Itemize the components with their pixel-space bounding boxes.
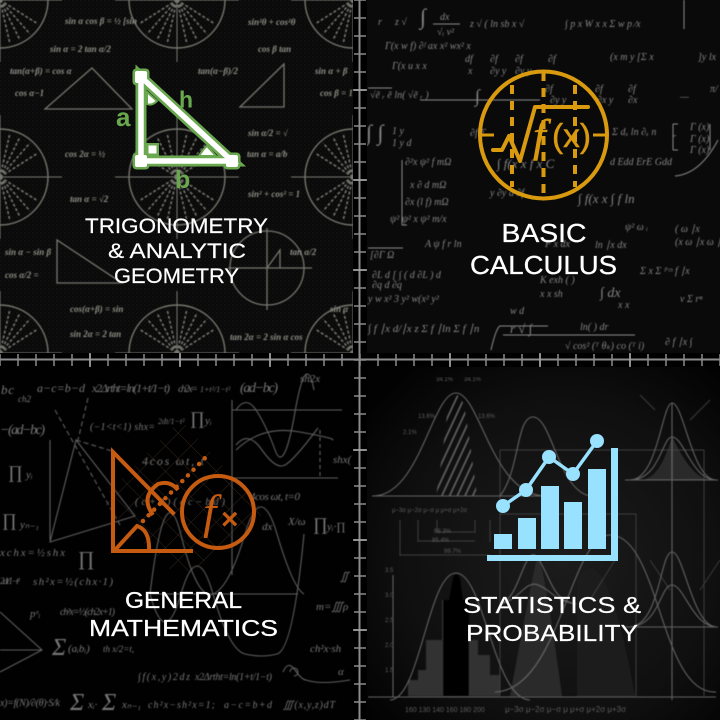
heading: general mathematics: GENERAL (125, 587, 242, 613)
panel background: calculus formulas: ∫ p x W x x Σ w p ∕x (564, 19, 641, 30)
panel background: chalk trigonometry sketches: tan α/2 (290, 247, 317, 257)
panel background: chalk trigonometry sketches: sin 2α = 2 tan (69, 329, 121, 339)
panel: statistics and probability (367, 367, 720, 720)
heading: trigonometry and analytic geometry (85, 215, 268, 288)
panel background: chalkboard formulas and curves: ∏ (8, 462, 23, 482)
panel background: chalkboard formulas and curves: xᵢ· (87, 699, 98, 711)
panel background: chalkboard formulas and curves: ch²x=½(ch2x+1) (60, 607, 116, 618)
panel background: calculus formulas: ∂f (595, 84, 604, 95)
panel background: chalk trigonometry sketches: sin²θ + cos²θ (247, 17, 296, 27)
panel background: calculus formulas: ∂y y (550, 95, 567, 106)
heading: statistics and probability: PROBABILITY (466, 620, 638, 646)
panel background: calculus formulas: Σ dₓ ln ∂ₓ n (611, 127, 656, 138)
panel background: calculus formulas: ]y lx (697, 52, 717, 63)
panel background: chalk trigonometry sketches: cos(α+β) = sin (70, 304, 123, 314)
panel background: calculus formulas: K exh ( ) (539, 275, 575, 286)
panel background: chalkboard formulas and curves: m=∭ρ (316, 601, 348, 613)
panel background: calculus formulas: x ∂ d mΩ (409, 180, 446, 191)
panel background: normal distribution charts: 68.3% (434, 529, 452, 535)
panel background: chalkboard formulas and curves: x)=f(N)/∂(θ)·S/k (0, 698, 61, 709)
panel background: normal distribution charts: μ−3σ μ−2σ μ−σ μ μ+σ μ+2σ μ+3σ (505, 705, 626, 714)
panel background: calculus formulas: [∂Γ Ω (370, 250, 394, 261)
panel background: calculus formulas: ∫ (418, 4, 428, 30)
panel background: normal distribution charts: 3.5 (385, 568, 394, 574)
panel background: calculus formulas: v Σ rⁿ (680, 294, 703, 305)
panel background: chalkboard formulas and curves: th x/2=t, (103, 644, 134, 654)
panel background: calculus formulas: x x sh (539, 289, 563, 300)
icon label: fx: × (221, 503, 239, 536)
panel background: chalk trigonometry sketches: sin α + β (314, 66, 348, 76)
panel background: chalkboard formulas and curves: (aᵢbᵢ) (68, 643, 90, 655)
panel background: chalkboard formulas and curves: ∏ (190, 408, 205, 428)
icon label: side letters: b (175, 166, 190, 194)
panel background: calculus formulas: ∂x (l f) mΩ (405, 197, 449, 208)
panel background: calculus formulas: Γ (x) (689, 134, 710, 145)
panel background: chalkboard formulas and curves: sh²x=½(chx·1) (33, 576, 113, 588)
panel background: chalk trigonometry sketches: sin α/2 = √ (247, 128, 289, 138)
heading: trigonometry and analytic geometry: GEOMETRY (114, 265, 239, 288)
panel background: calculus formulas: ln( ) dr (580, 322, 608, 333)
panel background: chalkboard formulas and curves: xₙ₋₁ (121, 699, 141, 711)
panel background: calculus formulas: r (672, 132, 676, 143)
panel background: chalkboard formulas and curves: ∏ (78, 548, 94, 570)
panel background: chalk trigonometry sketches: tan α = √2 (70, 194, 109, 204)
panel background: calculus formulas: Γ (x) (689, 122, 710, 133)
panel background: chalkboard formulas and curves: X/ω (287, 516, 306, 528)
panel background: normal distribution charts: 95.4% (432, 538, 450, 544)
panel background: chalkboard formulas and curves: 2dt/1−t² (158, 417, 185, 426)
panel background: chalkboard formulas and curves: yᵢ (204, 415, 212, 427)
panel background: calculus formulas: π/ (710, 84, 719, 95)
panel background: calculus formulas: Γ (x) (689, 145, 710, 156)
panel background: chalkboard formulas and curves: 4cos ωt, t=0 (250, 491, 300, 503)
panel background: chalk trigonometry sketches: tan α = a/b (247, 149, 288, 159)
heading: basic calculus: BASIC (502, 220, 586, 248)
panel background: chalkboard formulas and curves: ∬ (340, 571, 350, 583)
panel background: chalkboard formulas and curves: bc (1, 382, 14, 397)
heading: trigonometry and analytic geometry: & ANALYTIC (108, 240, 246, 263)
panel background: normal distribution charts: 2.0 (385, 643, 394, 649)
panel background: chalkboard formulas and curves: a−c=b+d (224, 700, 273, 711)
panel background: calculus formulas: w d (510, 306, 525, 317)
panel background: calculus formulas: ∂f (548, 54, 557, 65)
icon: gold circle with square root of f(x) (480, 72, 607, 198)
panel background: chalkboard formulas and curves: −(ad−bc) (0, 423, 45, 438)
panel background: calculus formulas: ψ² ψ² x ψ² m/x (390, 214, 447, 225)
icon label: side letters: h (179, 86, 193, 112)
panel background: calculus formulas: ( ω ∣x (675, 224, 700, 235)
panel background: chalk trigonometry sketches: tan(α+β) = cos α (10, 66, 73, 76)
panel background: calculus formulas: y ∂y d ∂f (489, 188, 525, 199)
heading: statistics and probability (463, 592, 641, 646)
panel background: chalk trigonometry sketches: tan 2α = 2 sin α cos (230, 332, 303, 342)
panel background: chalkboard formulas and curves: ch²x−sh²x=1; (148, 700, 215, 711)
panel background: calculus formulas: ∂y y (490, 66, 507, 77)
panel background: chalkboard formulas and curves: Σ (51, 635, 66, 661)
panel background: chalkboard formulas and curves: (−1<t<1) shx= (90, 422, 155, 433)
panel background: calculus formulas: ∂f (515, 54, 524, 65)
panel background: calculus formulas: A ψ f r ln (424, 239, 462, 250)
panel background: calculus formulas: ∫ f ∣x d/∣x z Σ f ∣ln Σ f ∣n (367, 323, 480, 335)
panel background: calculus formulas: ∫ dx (599, 286, 621, 301)
panel background: calculus formulas: Γ(x w f) ∂ᶠ ax x² wx² x (384, 41, 471, 52)
icon label: f(x): f (533, 110, 552, 161)
heading: general mathematics (89, 587, 278, 641)
panel background: calculus formulas: x (467, 66, 473, 77)
panel background: normal distribution charts: 2.1% (403, 430, 417, 436)
panel: trigonometry and analytic geometry (0, 0, 353, 353)
panel background: calculus formulas: ∫ ∫ (364, 120, 386, 146)
panel background: chalkboard formulas and curves: pˣᵢ (29, 608, 41, 620)
panel background: calculus formulas: z √ (394, 17, 407, 28)
icon label: fx (203, 486, 239, 539)
heading: statistics and probability: STATISTICS & (463, 592, 641, 618)
heading: general mathematics: MATHEMATICS (89, 615, 278, 641)
panel background: calculus formulas: 1 y d (392, 138, 412, 149)
panel background: chalk trigonometry sketches: sin² + cos² = 1 (247, 189, 300, 199)
panel background: calculus formulas: √ē ᵣ ē ln( √ē ᵣ ) (370, 90, 429, 101)
panel background: calculus formulas: ∂L d [ ∫ ( d ∂L ) d (372, 270, 442, 281)
panel background: calculus formulas: — (679, 92, 689, 103)
panel background: chalkboard formulas and curves (0, 367, 353, 720)
panel background: chalk trigonometry sketches: sin α cos β = ½ [sin (64, 16, 137, 26)
panel background: chalk trigonometry sketches: sin α = 2 tan α/2 (49, 44, 111, 54)
panel background: calculus formulas: ∂q d ∂q (372, 280, 402, 291)
panel: general mathematics (0, 367, 353, 720)
panel background: chalk trigonometry sketches: tan(α−β)/2 (198, 66, 239, 76)
panel background: calculus formulas: ∂ f ∣x ∫ (665, 337, 694, 348)
panel background: chalkboard formulas and curves: dx (262, 521, 272, 533)
panel background: calculus formulas: (x m y [Σ x (610, 52, 654, 63)
panel background: chalkboard formulas and curves: ch²x·sh (310, 643, 342, 655)
panel background: chalkboard formulas and curves: yᵢ·∏ (326, 521, 345, 533)
panel background: chalk trigonometry sketches: cos α/2 = (5, 270, 39, 280)
panel background: chalkboard formulas and curves: Σ (69, 690, 84, 716)
icon: blue bar and line chart (487, 434, 618, 561)
panel background: chalkboard formulas and curves: Σ (101, 690, 116, 716)
panel background: chalkboard formulas and curves: ∏ (2, 510, 17, 530)
panel background: calculus formulas: ∂x (628, 95, 638, 106)
heading: trigonometry and analytic geometry: TRIGONOMETRY (85, 215, 268, 238)
panel background: chalk trigonometry sketches: sin α − sin β (4, 247, 51, 257)
panel background: calculus formulas: ∂f (545, 84, 554, 95)
panel background: chalkboard formulas and curves: 2dt/1−t² (0, 576, 20, 586)
panel background: calculus formulas: dx (440, 12, 450, 23)
panel background: chalk trigonometry sketches: cos α−1 (15, 88, 44, 98)
icon label: side letters: a (116, 102, 131, 132)
panel background: normal distribution charts (367, 367, 720, 720)
panel background: calculus formulas: y w x² 3 y² w(x² y² (367, 294, 440, 305)
panel background: calculus formulas: ∫ f(x x ∫ f ln (577, 191, 635, 207)
panel background: chalkboard formulas and curves: 1+t²/1−t² (200, 385, 231, 394)
panel background: normal distribution charts: 1.5 (385, 668, 394, 674)
panel background: chalkboard formulas and curves: yₙ₋₁ (19, 519, 39, 531)
panel background: calculus formulas (364, 0, 720, 353)
panel background: normal distribution charts: 99.7% (444, 549, 462, 555)
panel background: chalkboard formulas and curves: (ad−bc) (240, 381, 278, 396)
icon: green right triangle with sides a, b, h (116, 68, 240, 194)
panel background: calculus formulas: Σ x Σ ᴾᶜˢ f ∣x (639, 266, 690, 277)
panel background: normal distribution charts: 34.1% (464, 377, 482, 383)
panel background: calculus formulas: ∂²x ψ² f mΩ (405, 157, 451, 168)
icon label: f(x): (x) (552, 117, 591, 154)
panel background: chalkboard formulas and curves: ∏ (313, 514, 328, 534)
panel background: calculus formulas: 1 y (392, 126, 404, 137)
panel background: calculus formulas: ∫ (474, 86, 481, 107)
panel background: normal distribution charts: 13.6% (478, 414, 496, 420)
panel background: calculus formulas: ∂x y (597, 95, 614, 106)
panel background: chalk trigonometry sketches: sin α (329, 304, 349, 314)
panel background: calculus formulas: Γ(x u x x (391, 61, 427, 72)
panel background: calculus formulas: r (378, 17, 382, 28)
panel background: chalkboard formulas and curves: x2Δrtht=ln(1+t/1−t) (91, 381, 170, 395)
panel background: chalkboard formulas and curves: yᵢ (25, 469, 33, 481)
panel background: chalk trigonometry sketches: cos β = 1 (320, 88, 353, 98)
panel background: chalk trigonometry sketches (0, 0, 353, 353)
icon label: fx: f (203, 486, 222, 539)
panel background: calculus formulas: F x dx (544, 239, 571, 250)
heading: basic calculus: CALCULUS (470, 252, 617, 280)
panel background: calculus formulas: r √ ∫ (510, 321, 534, 337)
panel background: normal distribution charts: 2.5 (385, 618, 394, 624)
panel background: calculus formulas: ∂f Σ (470, 128, 486, 139)
icon: orange triangle, arcs and f(x) circle (113, 452, 254, 551)
panel background: chalk trigonometry sketches: cos β tan (258, 44, 291, 54)
panel background: chalkboard formulas and curves: a−c=b−d (37, 381, 86, 395)
panel background: calculus formulas: ln ∣x dx (595, 240, 627, 251)
icon label: f(x) (533, 110, 591, 161)
panel background: calculus formulas: ∂f (490, 54, 499, 65)
panel background: chalkboard formulas and curves: ch2 (18, 394, 31, 404)
panel background: calculus formulas: ∂f (628, 84, 637, 95)
panel background: chalkboard formulas and curves: sh2x (300, 373, 320, 385)
panel background: calculus formulas: √ cos² (ᵀ θₖ) co (ᵀ i) (565, 341, 645, 352)
icon label: side letters (116, 86, 193, 194)
panel background: chalkboard formulas and curves: shx( (333, 454, 353, 466)
panel background: chalkboard formulas and curves: (c+d)(ac−bd) (135, 497, 226, 508)
panel background: chalk trigonometry sketches: cos 2α = ½ (65, 149, 105, 159)
panel background: chalkboard formulas and curves: α (338, 666, 344, 678)
panel background: normal distribution charts: 3.0 (385, 593, 394, 599)
panel background: calculus formulas: ∂y y (515, 66, 532, 77)
panel background: chalkboard formulas and curves: ∭(x,y,z)dT (283, 700, 336, 711)
panel background: chalkboard formulas and curves: ∫f(x,y)2dz (137, 672, 190, 683)
panel background: calculus formulas: d Edd ErE Gdd (610, 157, 673, 168)
panel background: normal distribution charts: 13.6% (418, 414, 436, 420)
panel background: calculus formulas: x x (617, 300, 630, 311)
panel background: chalkboard formulas and curves: x2Δrtht=ln(1+t/1−t) (194, 672, 273, 683)
panel background: normal distribution charts: 34.1% (436, 377, 454, 383)
panel background: calculus formulas: df (465, 54, 474, 65)
panel background: calculus formulas: ψ² ω ᵢ (625, 222, 648, 233)
panel background: chalkboard formulas and curves: 4cos ωt, t (142, 454, 205, 468)
heading: basic calculus (470, 220, 617, 280)
panel background: normal distribution charts: μ−3σ μ−2σ μ−σ μ μ+σ μ+2σ (392, 508, 467, 514)
panel background: chalkboard formulas and curves: ch2x= (178, 383, 198, 395)
panel background: calculus formulas: √ᵢ ν² (437, 27, 455, 38)
panel background: normal distribution charts: 160 130 140 160 180 200 (405, 707, 485, 714)
panel background: calculus formulas: ∫ f(x x f x C (496, 156, 555, 172)
panel: basic calculus (364, 0, 720, 353)
panel background: calculus formulas: z √ ( ln sb x √ (469, 19, 525, 30)
panel background: chalkboard formulas and curves: xchx=½shx (0, 547, 65, 559)
